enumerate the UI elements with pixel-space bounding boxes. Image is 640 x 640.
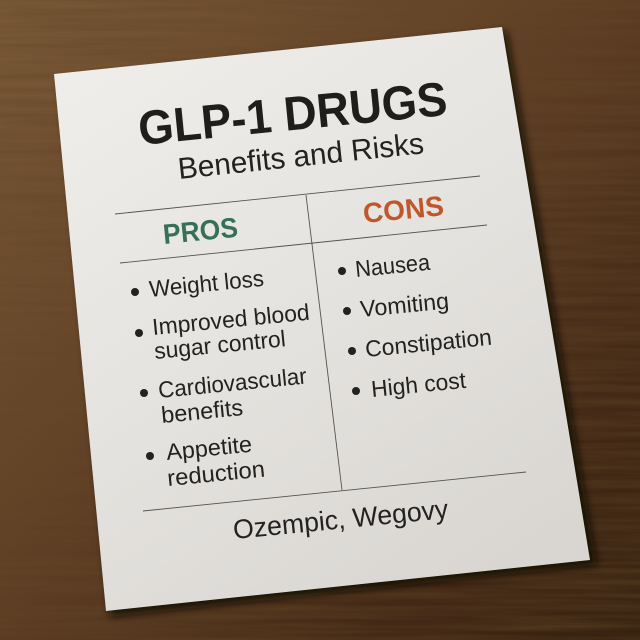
subtitle: Benefits and Risks [176,127,425,186]
pro: cardiovascular benefits: benefits [160,394,244,428]
pro: appetite reduction: Appetite [165,431,253,465]
pro: cardiovascular benefits [157,363,308,428]
pros bullets [131,288,154,460]
list: pros [131,265,311,491]
card shadow [60,31,597,617]
panel: paper card [54,27,590,611]
heading: cons: CONS [362,190,445,229]
pro: cardiovascular benefits: Cardiovascular [157,363,308,403]
pro: improved blood sugar control: sugar control [153,325,287,364]
con: high cost: High cost [370,367,468,402]
list: cons [338,249,493,402]
cons bullets [338,267,360,395]
con: vomiting: Vomiting [359,287,450,322]
table grid lines [115,176,526,511]
pro: improved blood sugar control: Improved blood [151,299,311,340]
footer: brand names: Ozempic, Wegovy [232,494,450,545]
pro: appetite reduction: reduction [166,456,266,491]
title: GLP-1 DRUGS [136,73,450,156]
con: nausea: Nausea [354,249,431,282]
pro: improved blood sugar control [151,299,311,364]
heading: pros: PROS [162,212,239,250]
pro: appetite reduction [165,431,266,491]
pro: weight loss: Weight loss [148,265,265,302]
con: constipation: Constipation [364,324,493,362]
